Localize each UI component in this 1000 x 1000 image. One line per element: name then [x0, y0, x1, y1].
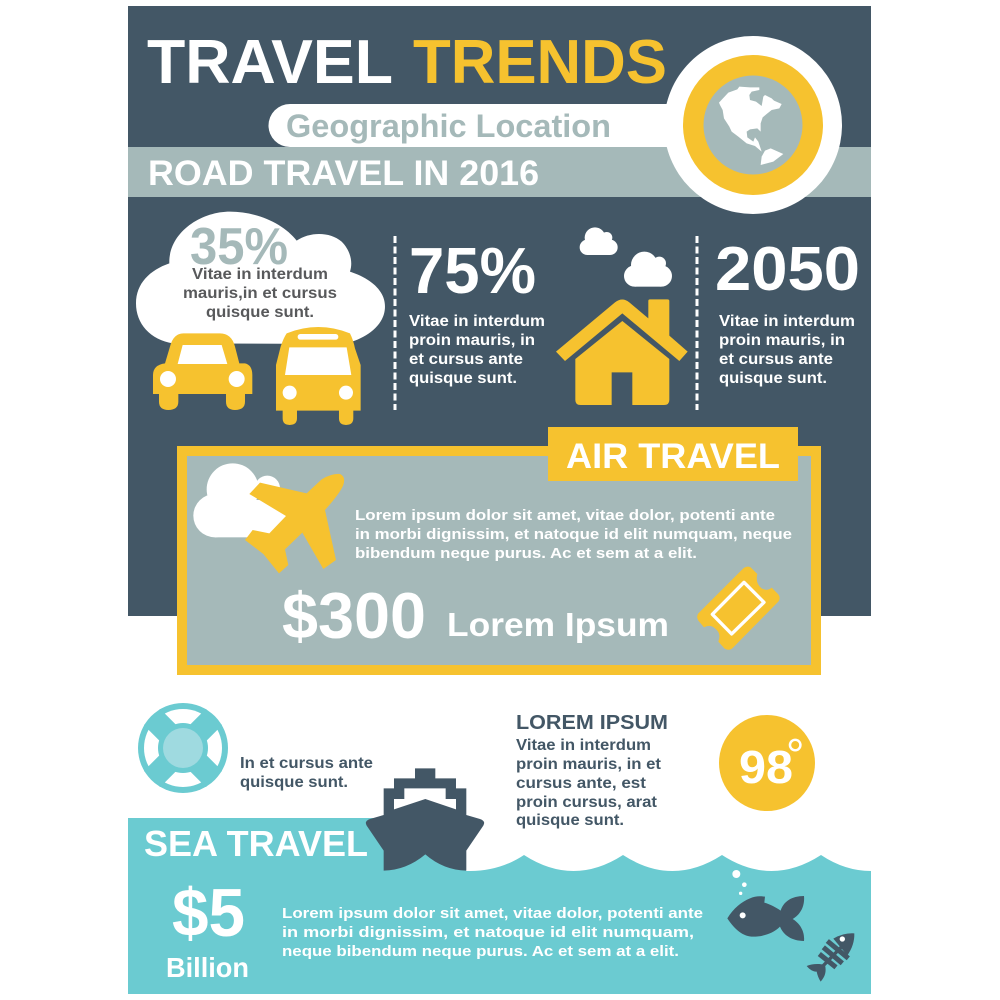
stat block: 75%: proin mauris, in: [409, 332, 535, 349]
text: air travel description: [355, 507, 792, 562]
title: [147, 28, 667, 97]
icon: ship: [366, 768, 484, 871]
panel: air travel: [182, 427, 816, 670]
badge: 98 degrees: [719, 715, 815, 811]
stat block: 35% cloud: 35%: [190, 218, 288, 276]
stat block: 35% cloud: Vitae in interdum: [192, 266, 328, 283]
text block: lorem ipsum: Vitae in interdum: [516, 737, 651, 754]
text: air travel description: Lorem ipsum dolor sit amet, vitae dolor, potenti ante: [355, 507, 775, 524]
heading: air travel: [548, 427, 798, 481]
heading band: road travel: [128, 147, 871, 197]
heading: sea travel: SEA TRAVEL: [144, 823, 368, 864]
stat block: 2050: Vitae in interdum: [719, 313, 855, 330]
icon: fish with bubbles: [727, 870, 804, 941]
text: lifebuoy caption: [240, 755, 373, 791]
stat block: 75%: [409, 234, 545, 387]
text: air travel description: bibendum neque purus. Ac et sem at a elit.: [355, 545, 697, 562]
text: sea travel description: Lorem ipsum dolor sit amet, vitae dolor, potenti ante: [282, 905, 703, 922]
stat: $300: [282, 579, 669, 652]
title: TRAVEL: [147, 28, 393, 97]
icon: fish skeleton: [807, 933, 854, 982]
stat block: 75%: et cursus ante: [409, 351, 523, 368]
stat block: 35% cloud: quisque sunt.: [206, 304, 314, 321]
icon: airplane and cloud: [193, 463, 344, 573]
stat block: 35% cloud: mauris,in et cursus: [183, 285, 337, 302]
text block: lorem ipsum: [516, 712, 668, 829]
divider left: [394, 236, 396, 410]
stat block: 2050: 2050: [715, 235, 860, 304]
stat block: 75%: quisque sunt.: [409, 370, 517, 387]
stat: $5 billion: $5: [172, 875, 245, 951]
text block: lorem ipsum: proin mauris, in et: [516, 756, 661, 773]
panel: sea travel: [128, 818, 871, 994]
stat: $300: Lorem Ipsum: [447, 606, 669, 643]
text: sea travel description: neque bibendum neque purus. Ac et sem at a elit.: [282, 943, 679, 960]
text block: lorem ipsum: proin cursus, arat: [516, 794, 657, 811]
title: TRENDS: [413, 28, 667, 97]
heading band: road travel: ROAD TRAVEL IN 2016: [148, 154, 539, 193]
text: lifebuoy caption: quisque sunt.: [240, 774, 348, 791]
stat: $5 billion: [166, 875, 249, 983]
text block: lorem ipsum: quisque sunt.: [516, 812, 624, 829]
divider right: [696, 236, 698, 410]
text: sea travel description: in morbi dignissim, et natoque id elit numquam,: [282, 924, 694, 941]
stat block: 35% cloud: [136, 212, 385, 344]
text block: lorem ipsum: cursus ante, est: [516, 775, 646, 792]
stat block: 2050: quisque sunt.: [719, 370, 827, 387]
badge: 98 degrees: °: [786, 729, 804, 781]
icon: lifebuoy: [138, 703, 228, 793]
icon: house with clouds: [556, 227, 688, 405]
icon: bus: [276, 327, 361, 425]
panel: dark header background: [128, 6, 871, 616]
stat: $300: $300: [282, 579, 426, 652]
icon: ticket: [697, 567, 780, 650]
stat block: 2050: [715, 235, 860, 387]
text: lifebuoy caption: In et cursus ante: [240, 755, 373, 772]
heading: air travel: AIR TRAVEL: [566, 437, 780, 476]
text: air travel description: in morbi dignissim, et natoque id elit numquam, neque: [355, 526, 792, 543]
badge: 98 degrees: 98: [739, 741, 793, 793]
icon: globe badge: [664, 36, 842, 214]
stat block: 2050: et cursus ante: [719, 351, 833, 368]
stat block: 75%: Vitae in interdum: [409, 313, 545, 330]
subtitle pill: geographic location: [268, 104, 670, 147]
stat: $5 billion: Billion: [166, 952, 249, 983]
stat block: 75%: 75%: [409, 234, 536, 307]
subtitle pill: geographic location: Geographic Location: [286, 108, 611, 144]
stat block: 2050: proin mauris, in: [719, 332, 845, 349]
text: sea travel description: [282, 905, 703, 960]
text block: lorem ipsum: LOREM IPSUM: [516, 712, 668, 734]
icon: car: [153, 333, 252, 410]
